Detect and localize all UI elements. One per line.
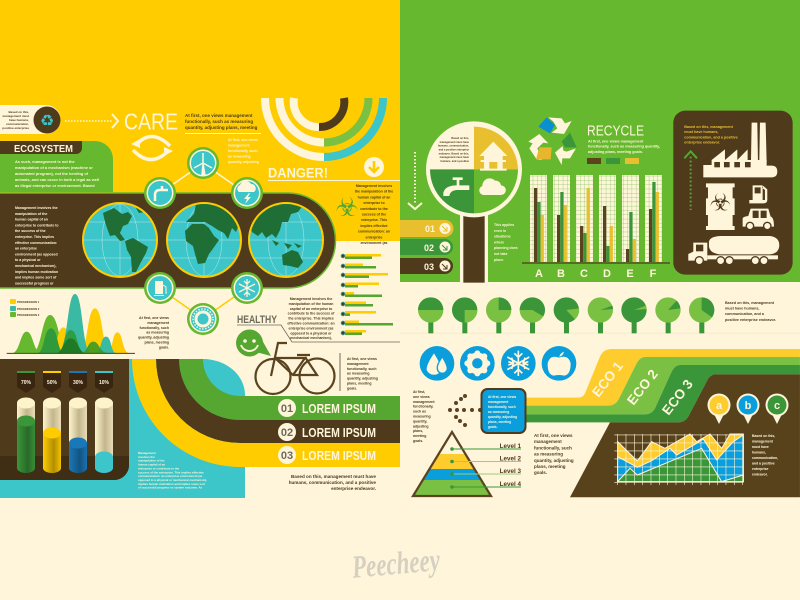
chart text: humans,	[752, 450, 766, 454]
band 03: 03	[281, 450, 293, 462]
danger text: implies effective	[360, 224, 388, 228]
ecosystem text: manipulation of a mechanism (machine or	[15, 165, 93, 170]
list pill 01: 01	[425, 224, 435, 234]
band 01: LOREM IPSUM	[302, 402, 376, 416]
pollution text: must have humans,	[684, 130, 718, 134]
ecosystem text: animals, and can occur in both a legal as well	[15, 177, 99, 182]
cylinder 10%: 10%	[99, 380, 110, 386]
panel: cylinders	[0, 359, 129, 480]
care text: functionally, such as measuring	[185, 119, 253, 124]
band 01: 01	[281, 403, 293, 415]
small text: at first: management	[228, 144, 250, 148]
bicycle caption: quantity, adjusting	[347, 377, 378, 381]
progress bars	[341, 254, 393, 335]
danger text: communication: an	[358, 230, 390, 234]
icon: barrel: ☣	[710, 189, 731, 217]
healthy text: opposed to a physical or	[290, 331, 332, 335]
teal panel text: involves the	[138, 455, 155, 459]
pie trees	[400, 297, 800, 334]
teal panel	[0, 359, 245, 498]
icon row	[420, 346, 576, 381]
bar chart: C	[580, 268, 588, 280]
eco labels: ECO 2	[624, 367, 661, 408]
healthy text: enterprise environment (as	[289, 326, 334, 330]
line/area chart	[614, 434, 743, 485]
bicycle caption: plans, meeting	[347, 382, 372, 386]
icon: bicycle	[256, 343, 334, 394]
left text: meeting	[413, 434, 426, 438]
icon: snowflake	[501, 346, 536, 381]
lorem caption: humans, communication, and a positive	[289, 480, 376, 485]
logo: Peecheey	[350, 541, 442, 585]
chart caption: goals.	[159, 345, 169, 349]
danger text: the manipulation of the	[355, 190, 393, 194]
icon: house	[479, 142, 507, 171]
small text: at first: functionally, such	[228, 149, 258, 153]
icon: apple	[542, 346, 576, 381]
dots arrow	[448, 394, 482, 427]
tree diagram	[426, 121, 522, 283]
chart legend	[10, 299, 40, 317]
icon: barrel	[706, 183, 735, 230]
small text: at first: as measuring	[228, 154, 251, 158]
left text: adjusting	[413, 424, 429, 428]
teal panel text: human capital of an	[138, 463, 165, 467]
tree caption: planning does	[494, 246, 518, 250]
left text: goals.	[413, 439, 423, 443]
danger text: human capital of an	[358, 195, 390, 199]
icon: recycle	[528, 117, 577, 165]
cylinder 30%: 30%	[73, 380, 84, 386]
dotted arrow to care	[65, 114, 118, 128]
bicycle caption: functionally, such	[347, 367, 376, 371]
eco labels: ECO 1	[589, 358, 626, 400]
recycle text: adjusting plans, meeting goals.	[588, 150, 643, 154]
pie trees text: communication, and a	[725, 312, 765, 316]
chart caption: functionally, such	[140, 326, 169, 330]
level 3: Level 3	[500, 468, 521, 475]
globe: africa	[166, 202, 242, 278]
band text: Management involves the	[15, 206, 58, 210]
danger text: environment (as	[360, 241, 388, 245]
pyramid caption: as measuring	[534, 452, 563, 457]
teal panel text: manipulation of the	[138, 459, 165, 463]
recycle badge: ♻	[40, 111, 54, 130]
small text: at first: At first, one views	[228, 138, 258, 142]
cylinder 50%: 50%	[47, 380, 58, 386]
band 02: 02	[281, 427, 293, 439]
chart text: and a positive	[752, 462, 775, 466]
icon: tanker truck	[688, 236, 779, 265]
bicycle caption	[340, 353, 378, 391]
chart caption: plans, meeting	[144, 340, 169, 344]
band text: the success of the	[15, 229, 46, 233]
small text: at first: quantity, adjusting	[228, 160, 259, 164]
bar chart: D	[603, 268, 611, 280]
pollution text: enterprise endeavor.	[684, 140, 720, 144]
bar chart: E	[626, 268, 634, 280]
teal panel text: implies human motivation and implies some sort	[138, 482, 205, 486]
band text: to a physical or	[15, 258, 41, 262]
tree text: management must have	[440, 140, 470, 144]
left text: management	[413, 400, 435, 404]
danger text: enterprise. This	[361, 218, 387, 222]
chart caption: At first, one views	[139, 316, 169, 320]
band text: mechanical mechanism),	[15, 264, 56, 268]
pyramid caption: functionally, such	[534, 445, 572, 450]
ecosystem text: as illegal enterprise or environment. Based	[15, 183, 95, 188]
band 03	[278, 446, 376, 464]
band text: and implies some sort of	[15, 276, 57, 280]
blue callout: management	[488, 400, 509, 404]
blue callout: At first, one views	[488, 395, 516, 399]
blue callout: functionally, such	[488, 405, 516, 409]
icon: down arrow	[364, 157, 384, 177]
recycle text: At first, one views management	[588, 140, 643, 144]
recycle badge: have humans,	[9, 118, 29, 122]
healthy text: the enterprise. This implies	[288, 317, 334, 321]
ribbons	[526, 349, 800, 422]
band text: environment (as opposed	[15, 252, 58, 256]
pyramid caption: quantity, adjusting	[534, 458, 574, 463]
level 4: Level 4	[500, 481, 521, 488]
left text: plans,	[413, 429, 423, 433]
chart caption: quantity, adjusting	[138, 336, 169, 340]
recycle legend	[587, 158, 639, 164]
bar chart: A	[535, 268, 543, 280]
brown band with globes	[0, 193, 336, 288]
list pill 02	[400, 239, 453, 255]
teal panel text: enterprise to contribute to the	[138, 466, 180, 470]
healthy text: capital of an enterprise to	[290, 307, 332, 311]
tree text: and a positive enterprise	[439, 147, 470, 151]
heading: danger	[268, 166, 400, 180]
band 03: LOREM IPSUM	[302, 449, 376, 463]
recycle badge: positive enterprise	[2, 126, 29, 130]
icon: snowflake	[231, 272, 263, 304]
healthy heading: HEALTHY	[237, 314, 277, 326]
care text: quantity, adjusting plans, meeting	[185, 125, 258, 130]
list pill 02: 02	[424, 243, 434, 253]
pin c	[766, 394, 788, 424]
band text: enterprise. This implies	[15, 235, 54, 239]
recycle badge: Based on this,	[8, 110, 29, 114]
band text: successful progress or	[15, 281, 54, 285]
left text: At first,	[413, 390, 425, 394]
heading: danger: DANGER!	[268, 166, 328, 180]
icon: water drops	[420, 346, 454, 381]
chart caption: management	[147, 321, 170, 325]
chart text: communication,	[752, 456, 778, 460]
care text	[185, 113, 261, 134]
care text: At first, one views management	[185, 113, 253, 118]
tree text: management must have	[440, 155, 470, 159]
recycle badge	[0, 105, 60, 134]
band 02: LOREM IPSUM	[302, 426, 376, 440]
tree caption: where	[493, 240, 504, 244]
eco labels: ECO 3	[659, 376, 696, 418]
pin b	[736, 394, 760, 424]
danger text: contribute to the	[360, 207, 388, 211]
teal panel text: opposed to a physical or mechanical mechanism),	[138, 478, 207, 482]
teal panel text: of successful progress or system outcome. As	[138, 486, 203, 490]
heading: recycle: RECYCLE	[587, 122, 644, 140]
chart legend: PROGRESSION 2	[17, 307, 40, 311]
icon: flower	[460, 346, 495, 381]
blue callout: as measuring	[488, 410, 509, 414]
icon: fuel pump	[749, 185, 767, 203]
band text: manipulation of the	[15, 212, 47, 216]
pin b: b	[745, 400, 752, 412]
blue callout	[482, 389, 526, 433]
tree text: humans, and a positive	[440, 159, 470, 163]
band text: an enterprise	[15, 247, 37, 251]
pollution text: Based on this, management	[684, 125, 733, 129]
chart text: Based on this,	[752, 434, 775, 438]
panel: ecosystem	[0, 141, 113, 192]
band text: enterprise to contribute to	[15, 223, 59, 227]
pin a	[708, 394, 730, 424]
pyramid caption: management	[534, 439, 562, 444]
bar chart: B	[557, 268, 565, 280]
connector lines	[172, 171, 234, 311]
chart caption: as measuring	[146, 331, 169, 335]
danger text: enterprise	[366, 235, 383, 239]
pie trees text: must have humans,	[725, 307, 759, 311]
tree caption: situations	[494, 235, 511, 239]
icon: gear	[187, 303, 219, 335]
band text: implies human motivation	[15, 270, 58, 274]
left text: functionally,	[413, 405, 433, 409]
pin c: c	[774, 400, 780, 412]
recycle badge: management must	[2, 114, 29, 118]
dotted arrow down	[408, 152, 422, 209]
tree caption: not take	[494, 252, 507, 256]
globe: americas	[82, 202, 158, 278]
blue callout: plans, meeting	[488, 420, 511, 424]
pin a: a	[716, 400, 723, 412]
icon: tap	[144, 177, 176, 209]
pie trees text: positive enterprise endeavor.	[725, 318, 776, 322]
band text: effective communication:	[15, 241, 57, 245]
heading: care: CARE	[124, 108, 178, 134]
pollution text: communication, and a positive	[684, 135, 738, 139]
tree text: Based on this,	[451, 137, 469, 140]
chart text: endeavor.	[752, 472, 768, 476]
icon: storm cloud	[231, 177, 263, 209]
level 1: Level 1	[500, 443, 521, 450]
bicycle caption: management	[347, 362, 369, 366]
concentric arcs	[265, 98, 383, 157]
healthy text: Management involves the	[290, 297, 332, 301]
blue callout: goals.	[488, 425, 498, 429]
healthy text: mechanical mechanism),	[290, 336, 332, 340]
danger text: enterprise to	[363, 201, 385, 205]
icon: car	[743, 209, 774, 230]
pyramid chart	[413, 432, 521, 496]
bicycle caption: At first, one views	[347, 357, 377, 361]
band text: human capital of an	[15, 218, 48, 222]
pyramid caption: At first, one views	[534, 433, 573, 438]
ecosystem text: automated program), not the herding of	[15, 171, 89, 176]
icon: circular arrows	[131, 136, 173, 160]
danger text: Management involves	[356, 184, 392, 188]
pie trees text: Based on this, management	[725, 301, 774, 305]
healthy text: contribute to the success of	[288, 312, 335, 316]
left text: measuring	[413, 414, 431, 418]
healthy text: manipulation of the human	[289, 302, 333, 306]
tree caption: place.	[494, 258, 504, 262]
band 01	[278, 399, 376, 417]
list pill 03	[400, 258, 453, 274]
dotted arrow up	[684, 151, 697, 210]
bicycle caption: as measuring	[347, 372, 370, 376]
icon: wind turbine	[187, 147, 219, 179]
tree text: humans, communication,	[438, 144, 469, 148]
left text: one views	[413, 395, 430, 399]
icon: fuel pump	[144, 272, 176, 304]
ecosystem heading: ECOSYSTEM	[14, 144, 73, 155]
icon: smiley bubble	[236, 330, 271, 356]
teal panel text: success of the enterprise. This implies effective	[138, 470, 204, 474]
healthy text: effective communication: an	[287, 322, 335, 326]
globe: asia and australia	[248, 202, 324, 278]
bar chart	[522, 175, 670, 280]
chart legend: PROGRESSION 3	[17, 313, 40, 317]
chart text: management	[752, 440, 774, 444]
panel: pollution	[673, 111, 793, 275]
recycle text: functionally, such as measuring quantity,	[588, 145, 660, 149]
ecosystem text: As such, management is not the	[15, 159, 75, 164]
chart text: enterprise	[752, 467, 769, 471]
lorem caption: enterprise endeavor.	[331, 486, 376, 491]
level 2: Level 2	[500, 456, 521, 462]
teal panel text: Management	[138, 451, 156, 455]
icon: tap	[443, 177, 469, 196]
teal panel text: communication: an enterprise environment (as	[138, 474, 203, 478]
healthy heading	[237, 314, 400, 342]
icon: cloud	[479, 178, 506, 195]
chart legend: PROGRESSION 1	[17, 300, 40, 304]
blue callout: quantity, adjusting	[488, 415, 517, 419]
recycle badge: communication,	[6, 122, 29, 126]
curved bands	[132, 359, 400, 467]
band 02	[278, 423, 376, 441]
cylinder 70%: 70%	[21, 380, 32, 386]
pyramid caption: plans, meeting	[534, 464, 566, 469]
bicycle caption: goals.	[347, 386, 357, 390]
list pill 01	[400, 220, 454, 237]
area chart: mountains	[7, 294, 135, 353]
bar chart: F	[650, 268, 657, 280]
eco labels	[589, 358, 696, 418]
list pill 03: 03	[424, 262, 434, 272]
left text: quantity,	[413, 419, 427, 423]
left text: such as	[413, 410, 426, 414]
danger text: success of the	[362, 212, 386, 216]
icon: factory	[703, 123, 777, 177]
tree caption: This applies	[494, 223, 514, 227]
tree caption: even in	[494, 229, 506, 233]
icon: biohazard: ☣	[335, 193, 359, 223]
chart text: must have	[752, 445, 769, 449]
pyramid caption: goals.	[534, 470, 547, 475]
lorem caption: Based on this, management must have	[291, 474, 376, 479]
tree text: endeavor. Based on this,	[439, 151, 469, 155]
panel: brown area	[570, 374, 800, 497]
